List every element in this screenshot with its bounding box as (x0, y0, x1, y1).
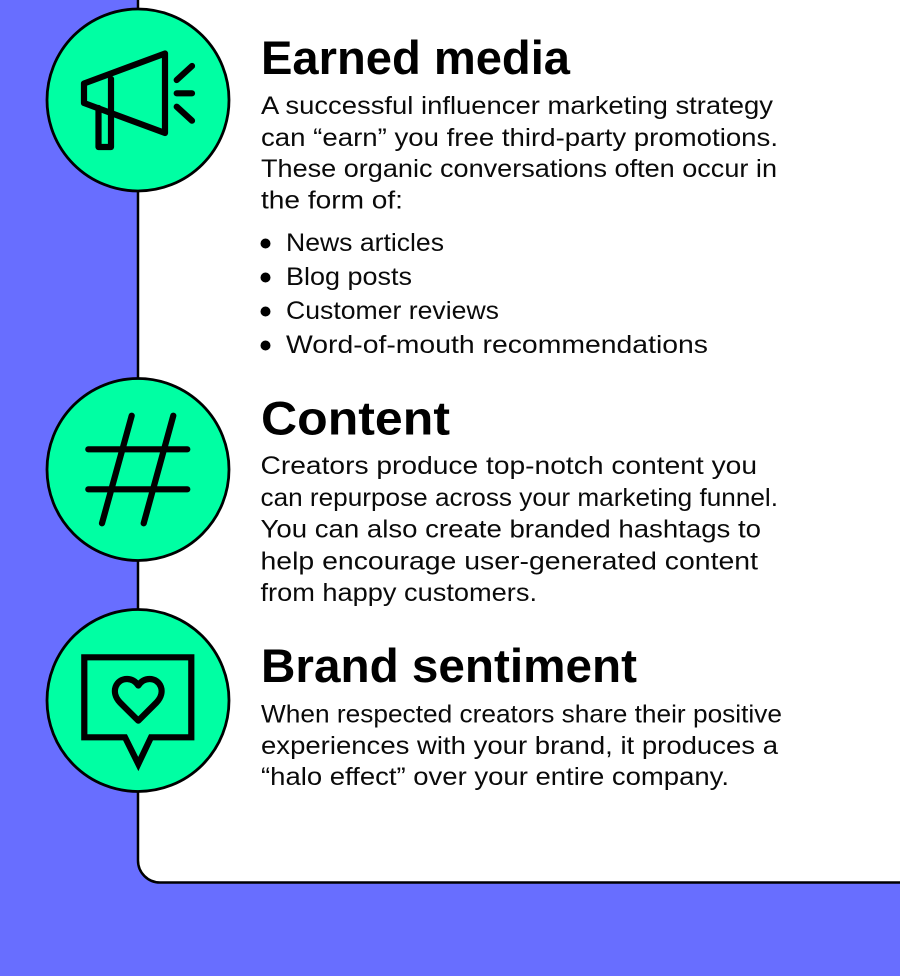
heading: brand sentiment: Brand sentiment (261, 639, 637, 692)
heading: content: Content (261, 392, 450, 444)
icon: megaphone (47, 9, 229, 191)
text block: content description: Creators produce top-notch content you (260, 452, 757, 480)
bullet list: earned media types: News articles (286, 229, 444, 257)
text block: brand sentiment description: “halo effect” over your entire company. (261, 763, 729, 791)
section: earned media (47, 9, 778, 359)
text block: content description: help encourage user-generated content (260, 548, 758, 576)
bullet list: earned media types (260, 229, 708, 359)
text block: earned media description: can “earn” you free third-party promotions. (261, 124, 778, 152)
text block: content description: You can also create branded hashtags to (260, 516, 761, 544)
icon: hashtag (47, 378, 229, 560)
text block: earned media description: These organic conversations often occur in (261, 155, 777, 183)
bullet list: earned media types: Customer reviews (286, 297, 499, 325)
text block: earned media description: A successful influencer marketing strategy (261, 92, 774, 120)
icon: speech bubble with heart (47, 610, 229, 792)
text block: brand sentiment description: When respected creators share their positive (261, 700, 782, 728)
bullet list: earned media types: Blog posts (286, 263, 412, 291)
bullet list: earned media types: Word-of-mouth recommendations (286, 331, 708, 359)
text block: brand sentiment description: experiences with your brand, it produces a (261, 732, 778, 760)
text block: earned media description (261, 92, 778, 214)
heading: earned media: Earned media (261, 31, 571, 84)
section: brand sentiment (47, 610, 782, 792)
text block: content description (260, 452, 778, 607)
panel: white content card (138, 0, 900, 882)
text block: brand sentiment description (261, 700, 782, 791)
text block: earned media description: the form of: (261, 186, 403, 214)
text block: content description: from happy customers. (260, 579, 537, 607)
text block: content description: can repurpose across your marketing funnel. (260, 484, 778, 512)
section: content (47, 378, 778, 607)
